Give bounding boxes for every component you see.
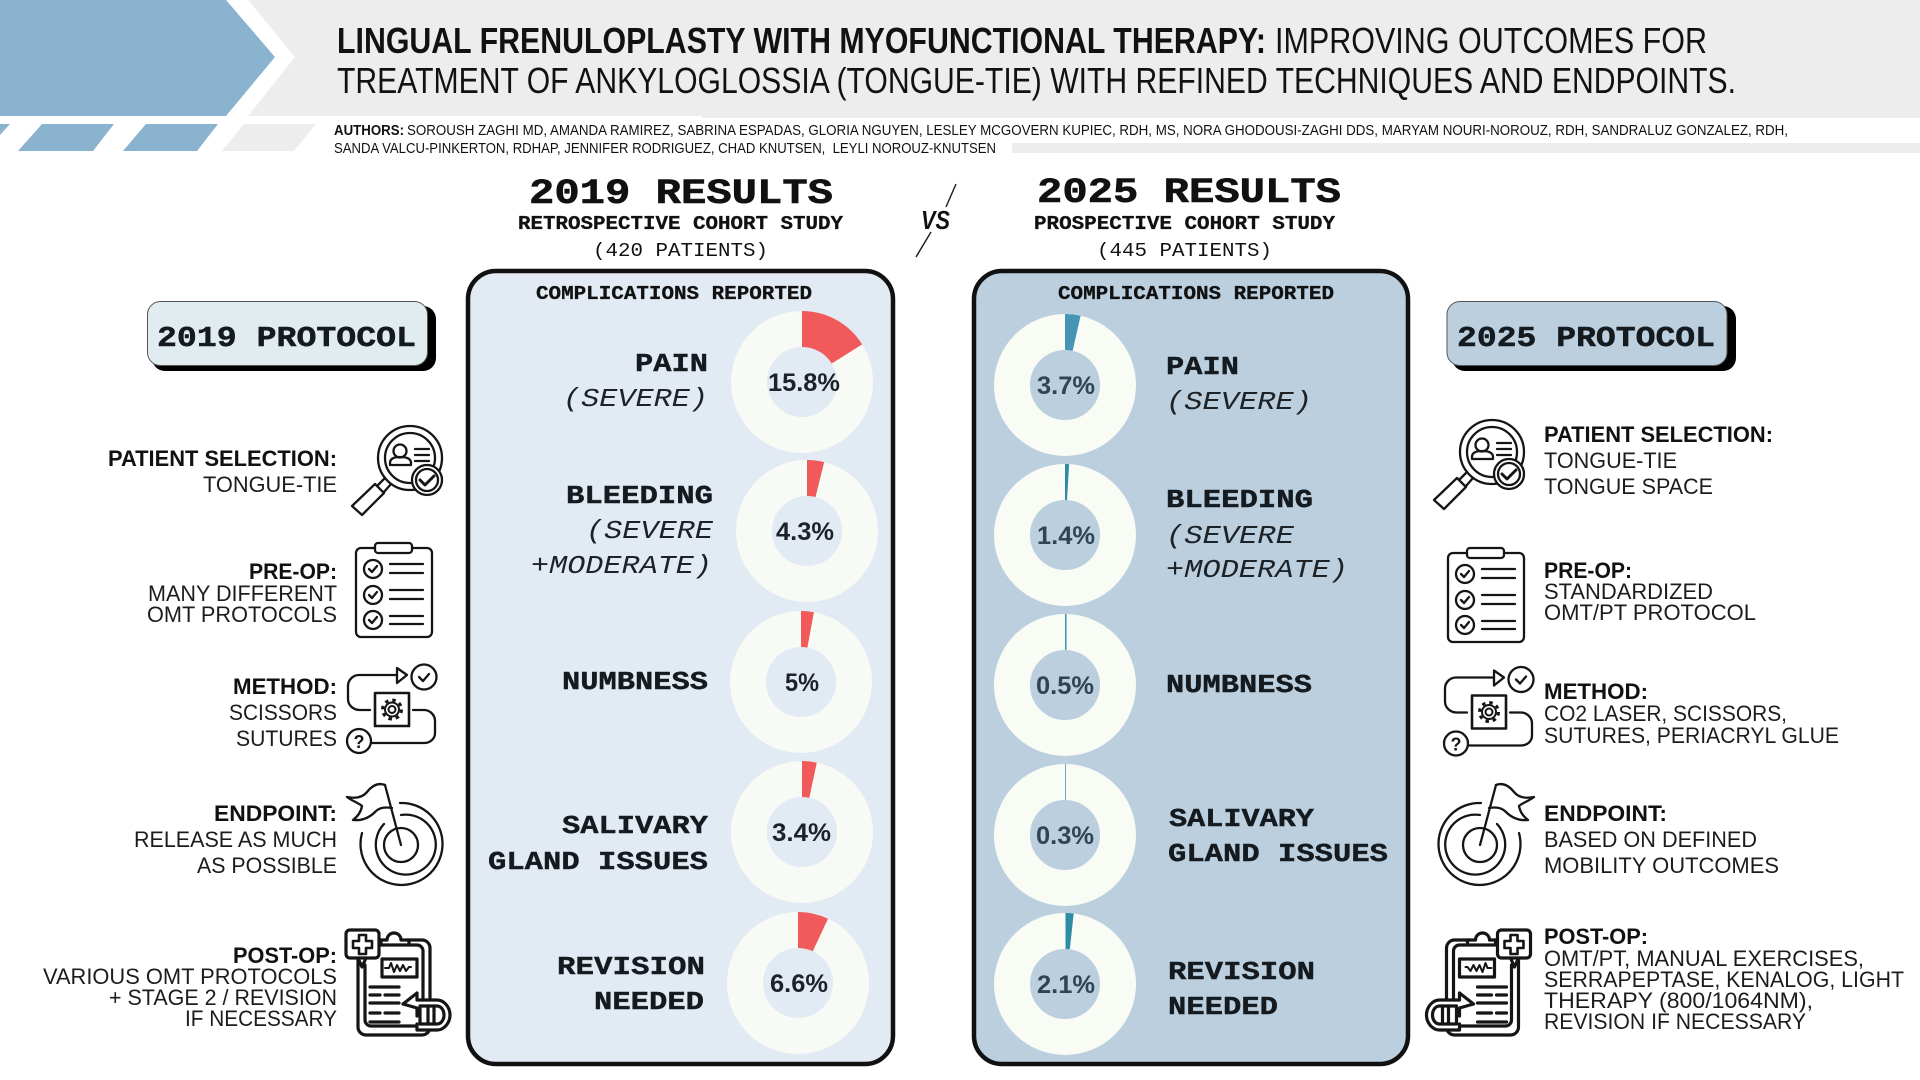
icon: medical report 2019 [346, 930, 450, 1035]
text: 2019 method: METHOD: [233, 674, 337, 699]
heading: 2025 results: PROSPECTIVE COHORT STUDY [1034, 213, 1336, 235]
row: bleeding 2019: +MODERATE) [531, 551, 712, 581]
text: 2019 pre-op [147, 559, 337, 627]
row: pain 2025: (SEVERE) [1166, 387, 1312, 417]
row: bleeding 2019: 4.3% [776, 518, 834, 546]
text: 2019 post-op: + STAGE 2 / REVISION [109, 985, 337, 1010]
row: pain 2025: PAIN [1166, 352, 1239, 382]
text: 2025 endpoint: ENDPOINT: [1544, 801, 1667, 826]
text: 2019 pre-op: MANY DIFFERENT [148, 581, 337, 606]
panel: 2025 complications [974, 271, 1408, 1064]
row: pain 2019 [563, 311, 862, 435]
row: revision needed 2025 [1012, 913, 1315, 1037]
row: revision needed 2019 [557, 912, 851, 1036]
authors [334, 123, 1788, 157]
row: bleeding 2025 [1012, 464, 1348, 588]
row: salivary gland issues 2025: SALIVARY [1169, 804, 1314, 834]
text: 2019 endpoint [134, 801, 337, 878]
panel title: complications reported 2025: COMPLICATIONS REPORTED [1058, 283, 1334, 305]
text: 2019 pre-op: PRE-OP: [249, 559, 337, 584]
row: numbness 2019: 5% [785, 669, 819, 697]
text: 2019 pre-op: OMT PROTOCOLS [147, 602, 337, 627]
row: revision needed 2019: 6.6% [770, 970, 828, 998]
icon: checklist 2025 [1448, 548, 1524, 642]
text: 2025 pre-op: STANDARDIZED [1544, 579, 1713, 604]
text: 2025 pre-op: PRE-OP: [1544, 558, 1632, 583]
row: numbness 2019: NUMBNESS [562, 667, 708, 697]
text: 2025 patient selection: TONGUE-TIE [1544, 448, 1677, 473]
title: IMPROVING OUTCOMES FOR [1275, 20, 1707, 61]
row: revision needed 2025: NEEDED [1168, 992, 1278, 1022]
versus mark [916, 184, 956, 257]
row: revision needed 2019: REVISION [557, 952, 705, 982]
row: salivary gland issues 2025: GLAND ISSUES [1168, 839, 1388, 869]
badge: 2019 protocol [148, 302, 436, 371]
icon: magnifier with patient 2019 [352, 426, 442, 515]
row: salivary gland issues 2025 [1012, 764, 1388, 888]
row: salivary gland issues 2019: 3.4% [772, 819, 831, 847]
icon: checklist 2019 [356, 543, 432, 637]
text: 2019 post-op [43, 943, 337, 1031]
text: 2025 method [1544, 679, 1839, 748]
icon: magnifier with patient 2025 [1434, 420, 1524, 509]
heading: 2019 results: RETROSPECTIVE COHORT STUDY [518, 213, 844, 235]
text: 2019 post-op: VARIOUS OMT PROTOCOLS [43, 964, 337, 989]
text: 2019 patient selection [108, 446, 337, 497]
row: pain 2019: (SEVERE) [563, 384, 708, 414]
header banner [0, 0, 1920, 153]
versus mark: VS [921, 205, 951, 235]
heading: 2025 results [1034, 173, 1341, 262]
row: pain 2019: 15.8% [768, 369, 840, 397]
text: 2019 post-op: POST-OP: [233, 943, 337, 968]
row: revision needed 2025: REVISION [1168, 957, 1315, 987]
heading: 2019 results: (420 PATIENTS) [593, 240, 768, 262]
row: bleeding 2019: BLEEDING [566, 481, 713, 511]
text: 2025 pre-op: OMT/PT PROTOCOL [1544, 600, 1756, 625]
icon: medical report 2025 [1426, 930, 1530, 1035]
icon: process flow 2019 [347, 664, 436, 753]
row: bleeding 2025: (SEVERE [1166, 521, 1294, 551]
row: revision needed 2019: NEEDED [594, 987, 704, 1017]
icon: process flow 2025 [1444, 667, 1534, 756]
row: bleeding 2025: 1.4% [1037, 522, 1095, 550]
text: 2019 patient selection: PATIENT SELECTION: [108, 446, 337, 471]
row: numbness 2025: NUMBNESS [1166, 670, 1312, 700]
row: bleeding 2019: (SEVERE [586, 516, 713, 546]
row: numbness 2025: 0.5% [1036, 672, 1094, 700]
text: 2019 patient selection: TONGUE-TIE [203, 472, 337, 497]
text: 2025 method: CO2 LASER, SCISSORS, [1544, 701, 1787, 726]
heading: 2025 results: 2025 RESULTS [1037, 173, 1341, 213]
text: 2025 method: METHOD: [1544, 679, 1648, 704]
icon: target flag 2019 [347, 784, 443, 885]
row: numbness 2019 [562, 611, 854, 735]
icon: target flag 2025 [1438, 784, 1534, 885]
text: 2025 post-op [1544, 924, 1904, 1034]
text: 2019 post-op: IF NECESSARY [185, 1006, 337, 1031]
text: 2025 post-op: POST-OP: [1544, 924, 1648, 949]
row: revision needed 2025: 2.1% [1037, 971, 1095, 999]
row: pain 2025 [1012, 314, 1312, 438]
text: 2025 patient selection: TONGUE SPACE [1544, 474, 1713, 499]
heading: 2025 results: (445 PATIENTS) [1097, 240, 1272, 262]
text: 2019 method: SUTURES [236, 726, 337, 751]
row: pain 2025: 3.7% [1037, 372, 1095, 400]
title [337, 20, 1736, 101]
text: 2025 post-op: THERAPY (800/1064NM), [1544, 988, 1813, 1013]
row: bleeding 2019 [531, 460, 860, 584]
text: 2025 patient selection [1544, 422, 1773, 499]
text: 2025 post-op: SERRAPEPTASE, KENALOG, LIGHT [1544, 967, 1904, 992]
text: 2019 endpoint: ENDPOINT: [214, 801, 337, 826]
row: salivary gland issues 2019: SALIVARY [562, 811, 708, 841]
authors: SOROUSH ZAGHI MD, AMANDA RAMIREZ, SABRINA ESPADAS, GLORIA NGUYEN, LESLEY MCGOVERN KUPIEC, RDH, MS, NORA GHODOUSI-ZAGHI DDS, MARYAM NOURI-NOROUZ, RDH, SANDRALUZ GONZALEZ, RDH, [407, 123, 1788, 139]
row: numbness 2025 [1012, 614, 1312, 738]
text: 2025 pre-op [1544, 558, 1756, 625]
text: 2025 endpoint: MOBILITY OUTCOMES [1544, 853, 1779, 878]
badge: 2025 protocol: 2025 PROTOCOL [1457, 322, 1715, 355]
authors: AUTHORS: [334, 123, 404, 139]
text: 2019 endpoint: RELEASE AS MUCH [134, 827, 337, 852]
text: 2019 method [229, 674, 337, 751]
text: 2025 method: SUTURES, PERIACRYL GLUE [1544, 723, 1839, 748]
row: salivary gland issues 2025: 0.3% [1036, 822, 1094, 850]
text: 2025 post-op: OMT/PT, MANUAL EXERCISES, [1544, 946, 1864, 971]
row: bleeding 2025: BLEEDING [1166, 485, 1313, 515]
heading: 2019 results: 2019 RESULTS [529, 174, 833, 214]
text: 2025 endpoint [1544, 801, 1779, 878]
panel title: complications reported 2019: COMPLICATIONS REPORTED [536, 283, 812, 305]
panel: 2019 complications [468, 271, 893, 1064]
badge: 2019 protocol: 2019 PROTOCOL [157, 322, 416, 355]
row: salivary gland issues 2019 [488, 761, 855, 885]
heading: 2019 results [518, 174, 844, 262]
text: 2025 post-op: REVISION IF NECESSARY [1544, 1009, 1806, 1034]
title: LINGUAL FRENULOPLASTY WITH MYOFUNCTIONAL THERAPY: [337, 20, 1266, 61]
authors: SANDA VALCU-PINKERTON, RDHAP, JENNIFER RODRIGUEZ, CHAD KNUTSEN, LEYLI NOROUZ-KNUTSEN [334, 141, 996, 157]
text: 2019 endpoint: AS POSSIBLE [197, 853, 337, 878]
text: 2025 patient selection: PATIENT SELECTION: [1544, 422, 1773, 447]
row: salivary gland issues 2019: GLAND ISSUES [488, 847, 708, 877]
row: bleeding 2025: +MODERATE) [1166, 555, 1348, 585]
text: 2025 endpoint: BASED ON DEFINED [1544, 827, 1757, 852]
text: 2019 method: SCISSORS [229, 700, 337, 725]
badge: 2025 protocol [1447, 302, 1736, 371]
row: pain 2019: PAIN [635, 349, 708, 379]
